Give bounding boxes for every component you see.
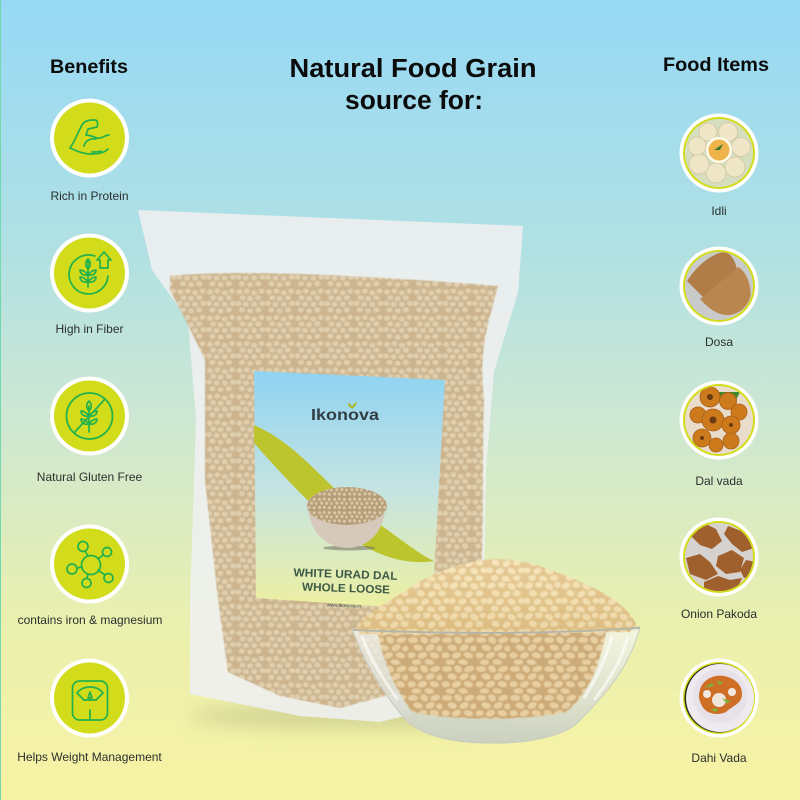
bowl rim xyxy=(353,628,640,633)
food: Dosa: Dosa xyxy=(705,335,733,349)
benefit: Natural Gluten Free xyxy=(37,376,143,484)
photo: dosa xyxy=(687,252,750,315)
pouch plastic xyxy=(138,210,523,722)
benefit: Helps Weight Management: Helps Weight Management xyxy=(17,750,162,764)
benefit: contains iron and magnesium: contains iron & magnesium xyxy=(18,613,162,627)
benefit: Helps Weight Management xyxy=(17,658,162,764)
food: Dal vada xyxy=(680,380,758,488)
brand logo: Ikonova xyxy=(311,407,379,424)
label title xyxy=(293,567,398,597)
panel: food items xyxy=(663,55,769,765)
brand logo xyxy=(311,402,379,424)
label bowl image xyxy=(307,487,387,550)
label swoosh xyxy=(254,425,434,562)
food: Dahi Vada: Dahi Vada xyxy=(691,751,747,765)
food: Dahi Vada xyxy=(680,658,758,765)
icon: weighing scale xyxy=(72,681,108,720)
photo: vada plate xyxy=(690,387,747,459)
benefit: High in Fiber xyxy=(50,234,129,336)
benefit: contains iron and magnesium xyxy=(18,524,162,627)
heading: Food Items: Food Items xyxy=(663,55,769,76)
label title: WHITE URAD DAL xyxy=(293,567,398,583)
heaped grains xyxy=(356,559,636,634)
benefit: Rich in Protein: Rich in Protein xyxy=(50,189,129,203)
food: Idli: Idli xyxy=(711,204,727,218)
label website: www.ikonova.in xyxy=(327,602,362,610)
product shadow xyxy=(190,703,530,729)
heading: Benefits: Benefits xyxy=(50,57,128,78)
photo: idli plate xyxy=(688,122,750,183)
label title: WHOLE LOOSE xyxy=(302,582,391,597)
heading: Natural Food Grain source for: Natural Food Grain xyxy=(290,55,536,83)
icon: flexed arm xyxy=(70,120,109,154)
product label xyxy=(254,371,445,610)
icon: crossed wheat xyxy=(66,393,112,439)
benefit: Natural Gluten Free: Natural Gluten Free xyxy=(37,470,143,484)
product: glass bowl xyxy=(352,559,640,743)
food: Onion Pakoda: Onion Pakoda xyxy=(681,607,757,621)
pouch grains xyxy=(170,273,498,708)
benefit: High in Fiber: High in Fiber xyxy=(55,322,124,336)
food: Dal vada: Dal vada xyxy=(695,474,743,488)
food: Idli xyxy=(680,114,758,218)
photo: dahi vada xyxy=(693,669,747,723)
product: pouch bag xyxy=(138,210,523,722)
icon: molecule xyxy=(67,542,113,588)
panel: benefits xyxy=(17,57,162,764)
photo: pakoda xyxy=(686,525,753,591)
heading: Natural Food Grain source for xyxy=(290,55,536,115)
food: Onion Pakoda xyxy=(680,518,758,621)
food: Dosa xyxy=(680,246,758,349)
bowl grains inside xyxy=(378,632,606,719)
icon: wheat with up arrow xyxy=(69,252,111,294)
benefit: Rich in Protein xyxy=(50,98,129,203)
bowl glass flutes xyxy=(362,636,628,700)
bowl glass xyxy=(352,627,640,743)
heading: Natural Food Grain source for: source for: xyxy=(345,87,483,115)
